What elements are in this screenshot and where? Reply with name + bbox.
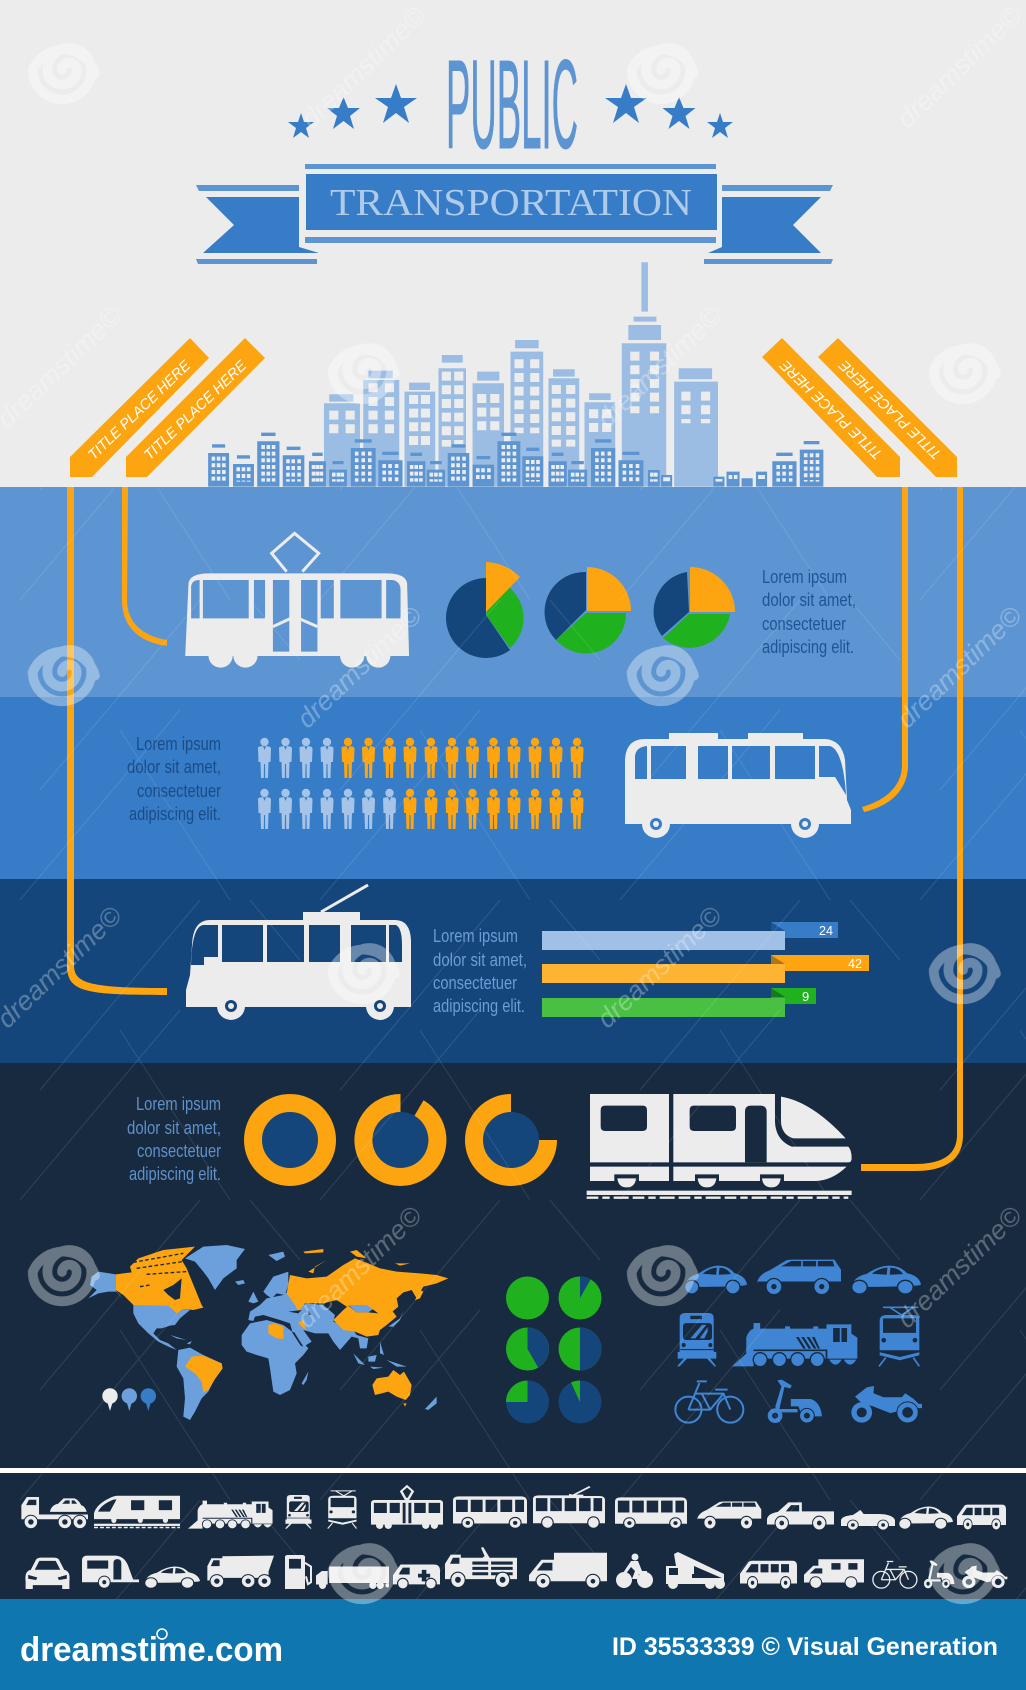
text block: tram: consectetuer	[762, 614, 846, 634]
text block: tram: Lorem ipsum	[762, 567, 847, 587]
banners: title place here: TITLE PLACE HERE	[836, 356, 945, 462]
text block: trolleybus: adipiscing elit.	[433, 996, 525, 1016]
text block: tram	[762, 567, 856, 657]
text block: train: consectetuer	[137, 1141, 221, 1161]
text block: tram: adipiscing elit.	[762, 637, 854, 657]
text block: bus: Lorem ipsum	[136, 734, 221, 754]
title ribbon: TRANSPORTATION	[196, 164, 833, 264]
map: americas	[88, 1245, 245, 1420]
bar chart: 42	[848, 956, 862, 971]
pictogram: people rows	[258, 738, 584, 829]
watermarks: dreamstime©	[295, 0, 432, 134]
text block: trolleybus: Lorem ipsum	[433, 926, 518, 946]
banners: title place here: TITLE PLACE HERE	[777, 356, 886, 462]
text block: tram: dolor sit amet,	[762, 590, 856, 610]
text block: train	[127, 1094, 221, 1184]
banners: title place here: TITLE PLACE HERE	[85, 358, 194, 463]
banners: title place here: TITLE PLACE HERE	[141, 358, 250, 463]
bar chart: 24	[819, 923, 833, 938]
watermarks: dreamstime©	[891, 1200, 1026, 1334]
icon strip: white vehicles row 2	[25, 1547, 1007, 1589]
footer text: logo and credit	[20, 1629, 998, 1669]
text: PUBLIC	[446, 34, 578, 175]
watermarks: dreamstime©	[591, 900, 728, 1034]
donut charts	[253, 1103, 548, 1177]
watermarks: dreamstime©	[891, 600, 1026, 734]
stars	[288, 84, 733, 138]
watermarks: dreamstime©	[891, 0, 1026, 134]
pie charts	[446, 562, 735, 658]
illustration: bus	[625, 733, 851, 838]
text block: trolleybus: dolor sit amet,	[433, 950, 527, 970]
illustration: high speed train	[587, 1094, 852, 1198]
text block: trolleybus	[433, 926, 527, 1016]
illustration: tram	[185, 533, 409, 668]
connector lines	[67, 487, 963, 1171]
text block: bus: consectetuer	[137, 781, 221, 801]
banners: title place here	[70, 338, 957, 477]
colored horizontal bands	[0, 487, 1026, 1690]
footer text: logo and credit: dreamstime.com	[20, 1631, 283, 1669]
text block: train: Lorem ipsum	[136, 1094, 221, 1114]
bar chart	[542, 922, 869, 1017]
text block: trolleybus: consectetuer	[433, 973, 517, 993]
icon strip: white vehicles row 1	[21, 1485, 1006, 1530]
text block: bus: dolor sit amet,	[127, 757, 221, 777]
watermarks: dreamstime©	[591, 300, 728, 434]
footer text: logo and credit: ID 35533339 © Visual Generation	[612, 1633, 998, 1661]
map: eurasia, africa, oceania	[242, 1249, 448, 1410]
text block: bus	[127, 734, 221, 824]
world map	[88, 1245, 448, 1420]
bar chart: 9	[802, 989, 809, 1004]
watermarks: dreamstime©	[291, 600, 428, 734]
text block: train: adipiscing elit.	[129, 1164, 221, 1184]
watermarks: dreamstime©	[291, 1200, 428, 1334]
map pins	[102, 1388, 156, 1411]
icon group: blue vehicles	[675, 1260, 922, 1423]
illustration: trolleybus	[186, 885, 411, 1020]
text block: train: dolor sit amet,	[127, 1118, 221, 1138]
illustration: city skyline	[208, 262, 823, 487]
text block: bus: adipiscing elit.	[129, 804, 221, 824]
small pie charts grid	[506, 1276, 602, 1424]
title ribbon: TRANSPORTATION: TRANSPORTATION	[330, 182, 692, 224]
